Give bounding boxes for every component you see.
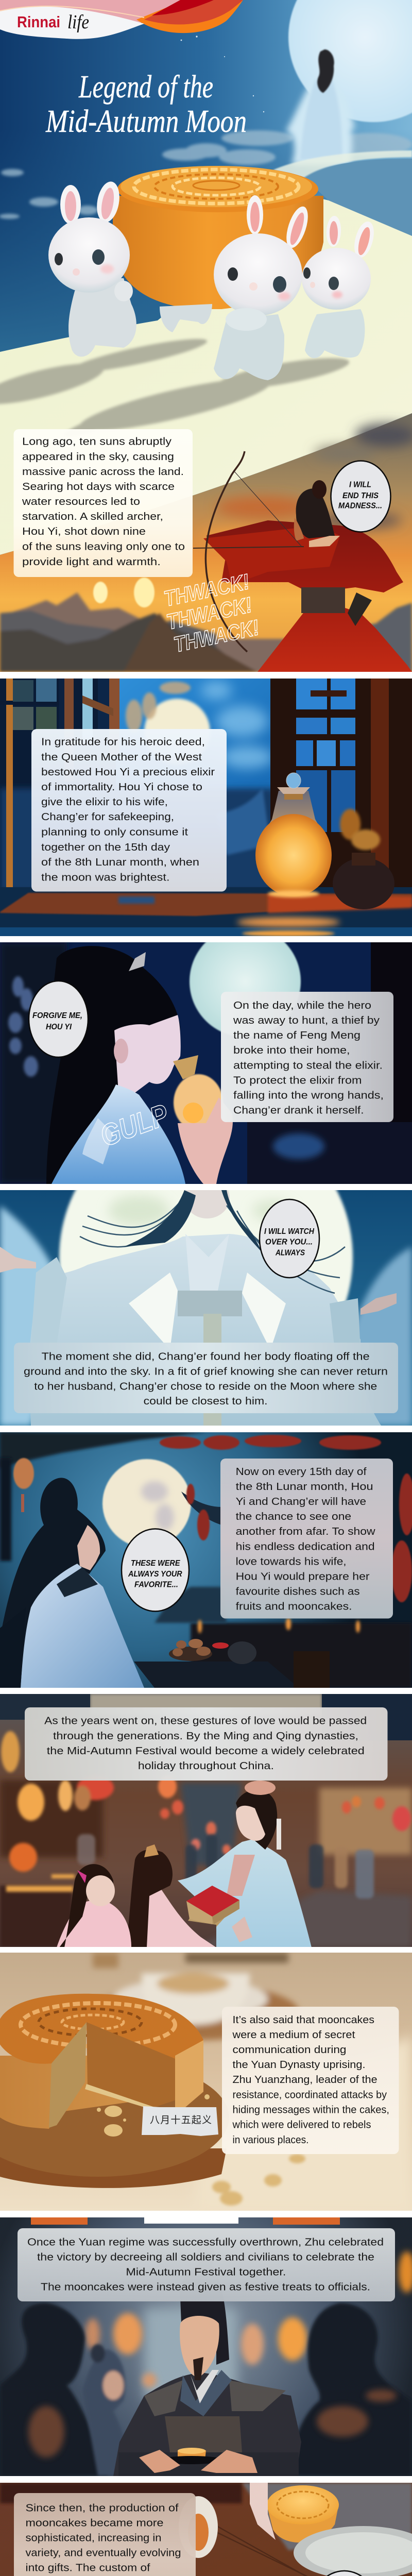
text card: gratitude: together on the 15th day [41, 842, 170, 853]
sound effect: thwack: THWACK! [171, 615, 261, 657]
text card: ten suns: Long ago, ten suns abruptly [22, 436, 171, 448]
background: blurred tabletop [0, 1953, 412, 2211]
text card: gratitude: of immortality. Hou Yi chose to [41, 782, 202, 793]
pale ring arc [273, 150, 412, 178]
blue cloud disc right of the mooncake [304, 159, 412, 236]
moon craters [141, 1481, 174, 1531]
speech bubble: I will end this madness [331, 461, 390, 532]
speech bubble: so yummy [310, 2571, 379, 2576]
text card: Yuan overthrown [18, 2228, 395, 2301]
text card: gratitude [31, 729, 227, 891]
text card: the thief: falling into the wrong hands, [233, 1090, 384, 1101]
background: blue night [0, 1432, 412, 1688]
mooncake on plate with hands [139, 2448, 258, 2473]
mountains [0, 592, 412, 672]
paper scroll with hidden message: 八月十五起义 [150, 2114, 212, 2126]
text card: every 15th day: the 8th Lunar month, Hou [236, 1481, 373, 1493]
glowing windows [198, 1618, 360, 1633]
Chang'e left hand [0, 1247, 36, 1273]
text card: every 15th day: love towards his wife, [236, 1556, 347, 1567]
full moon behind Chang'e [288, 0, 412, 122]
text card: secret communication: It’s also said that mooncakes [233, 2014, 374, 2026]
flowing hair [80, 1190, 345, 1293]
archer Hou Yi [193, 451, 412, 672]
crumbs on board [97, 2094, 210, 2137]
wooden board [0, 2058, 229, 2188]
soldier shoulder highlights [28, 2389, 397, 2458]
text card: ten suns: appeared in the sky, causing [22, 451, 174, 463]
text card: generations: As the years went on, these gestures of love would be passed [44, 1716, 367, 1727]
teacup [179, 2496, 218, 2558]
text card: secret communication: which were delivered to rebels [232, 2120, 371, 2131]
text card: the thief: broke into their home, [233, 1045, 350, 1056]
text card: the thief: On the day, while the hero [233, 1000, 371, 1011]
text card: Yuan overthrown: The mooncakes were instead given as festive treats to officials. [41, 2282, 370, 2293]
soldier bystander left [0, 2303, 108, 2476]
logo: Rinnai life: life [67, 11, 89, 33]
text card: the thief: the name of Feng Meng [233, 1030, 360, 1041]
giant moon [59, 1110, 353, 1404]
text card: secret communication [222, 2007, 399, 2154]
text card: floating away: ground and into the sky. In a fit of grief knowing she can never return [24, 1366, 388, 1377]
Chang'e figure in white robes [286, 49, 355, 165]
text card: every 15th day: his endless dedication and [236, 1541, 375, 1553]
background: moonlit sky [0, 1190, 412, 1426]
text card: gratitude: Chang’er for safekeeping, [41, 811, 174, 823]
text card: generations: through the generations. By the Ming and Qing dynasties, [53, 1731, 358, 1742]
text card: every 15th day: fruits and mooncakes. [236, 1601, 352, 1613]
white plate [294, 2526, 412, 2576]
speech bubble: these were always your favorite [122, 1529, 189, 1612]
panel: secret mooncake messages [0, 1953, 412, 2211]
background: night sky [0, 0, 412, 555]
market stall of goods [6, 1874, 75, 1892]
text card: the thief: was away to hunt, a thief by [233, 1015, 380, 1026]
text card: gratitude: of the 8th Lunar month, when [41, 857, 199, 868]
full moon [102, 1459, 191, 1548]
speech bubble: these were always your favorite: THESE WERE [131, 1559, 181, 1568]
text card: floating away: to her husband, Chang’er chose to reside on the Moon where she [34, 1381, 377, 1392]
paper scroll with hidden message [142, 2106, 218, 2136]
speech bubble: these were always your favorite: ALWAYS YOUR [128, 1570, 182, 1579]
bunny behind the cake [160, 304, 212, 332]
panel: Hou Yi's offerings [0, 1432, 412, 1688]
left lattice window [0, 679, 119, 936]
text card: since then: sophisticated, increasing in [26, 2533, 162, 2544]
logo: Rinnai life: Rinnai [17, 13, 60, 31]
moon spots [108, 1195, 294, 1340]
text card: since then: Since then, the production of [26, 2503, 179, 2514]
blossom branch [126, 682, 191, 733]
text card: secret communication: resistance, coordinated attacks by [233, 2090, 387, 2101]
background: lantern street [0, 1694, 412, 1947]
text card: ten suns: massive panic across the land. [22, 466, 184, 478]
sound effect: thwack [162, 569, 261, 657]
background: window with moonlit sky [0, 679, 412, 936]
red maple branches [160, 1435, 412, 1602]
text card: floating away [14, 1343, 398, 1413]
panel: Zhu's victory celebration [0, 2217, 412, 2476]
moon behind Chang'e [190, 926, 301, 1037]
soldier bystander right [288, 2303, 412, 2476]
text card: every 15th day: Hou Yi would prepare her [236, 1571, 370, 1583]
warm lantern glows [85, 2251, 412, 2387]
text card: ten suns: provide light and warmth. [22, 556, 161, 568]
Chang'e in flowing robes [28, 1177, 381, 1426]
panel: elixir of immortality [0, 679, 412, 937]
right wooden lattice [270, 679, 412, 891]
older girl from behind [126, 1844, 216, 1947]
sound effect: gulp: GULP [96, 1098, 173, 1153]
text card: every 15th day: Yi and Chang’er will have [236, 1496, 366, 1507]
text card: ten suns [13, 429, 193, 577]
moon in window [144, 699, 210, 765]
clouds in window [201, 681, 273, 769]
sunset sky [0, 413, 412, 672]
text card: the thief: attempting to steal the elixir. [233, 1060, 383, 1072]
giant mooncake [113, 166, 323, 309]
crumbs on table [212, 2154, 305, 2206]
text card: Yuan overthrown: the victory by decreeing all soldiers and civilians to celebrate the [37, 2252, 374, 2263]
crowd in the market [77, 1834, 374, 1899]
woman in blue hanfu [178, 1781, 312, 1947]
speech bubble: I will end this madness: MADNESS... [338, 502, 382, 511]
swirling mist right [349, 1247, 412, 1426]
background: misty camp [0, 2217, 412, 2476]
title: Mid-Autumn Moon [45, 104, 247, 139]
text card: since then [14, 2493, 196, 2576]
speech bubble: I will watch over you [260, 1199, 319, 1278]
red gift box [186, 1886, 239, 1927]
text card: every 15th day: the chance to see one [236, 1511, 351, 1522]
vase with dried flowers [333, 809, 394, 909]
red and orange lanterns [1, 1728, 411, 1872]
soldier bystander mid-left [82, 2344, 126, 2476]
speech bubble: I will watch over you: OVER YOU... [265, 1238, 313, 1247]
panel: festival through the generations [0, 1694, 412, 1947]
speech bubble: I will watch over you: I WILL WATCH [264, 1227, 314, 1236]
logo: Rinnai life [17, 11, 89, 33]
text card: ten suns: Searing hot days with scarce [22, 481, 175, 493]
bunny left [48, 180, 136, 357]
younger girl [57, 1864, 131, 1947]
text card: floating away: could be closest to him. [144, 1396, 268, 1407]
text card: secret communication: the Yuan Dynasty uprising. [233, 2059, 366, 2071]
text card: gratitude: give the elixir to his wife, [41, 796, 168, 808]
elixir flask glowing [255, 773, 332, 897]
background: wooden tabletop [0, 2483, 412, 2576]
text card: ten suns: of the suns leaving only one to [22, 541, 185, 552]
text card: secret communication: Zhu Yuanzhang, leader of the [233, 2074, 377, 2086]
Chang'e portrait [46, 946, 185, 1184]
hanging lantern [13, 1458, 34, 1512]
speech bubble: forgive me [29, 981, 88, 1057]
text card: every 15th day: another from afar. To show [236, 1526, 375, 1537]
text card: secret communication: were a medium of secret [232, 2029, 355, 2041]
text card: secret communication: hiding messages within the cakes, [233, 2104, 389, 2115]
panel: Chang'e drinks the elixir [0, 926, 412, 1184]
text card: gratitude: planning to only consume it [41, 826, 188, 838]
sun 2 [134, 578, 154, 607]
sunset clouds [201, 424, 412, 543]
text card: every 15th day: favourite dishes such as [236, 1586, 360, 1597]
speech bubble: forgive me: FORGIVE ME, [32, 1011, 82, 1020]
panel: cover and the ten suns [0, 0, 412, 672]
text card: secret communication: in various places. [233, 2134, 309, 2146]
text card: the thief [221, 992, 393, 1122]
text card: the thief: To protect the elixir from [233, 1075, 362, 1086]
header wave: brand ribbon [0, 0, 243, 39]
speech bubble: I will end this madness: END THIS [342, 492, 379, 500]
text card: since then: mooncakes became more [26, 2517, 164, 2529]
text card: generations: holiday throughout China. [138, 1760, 274, 1772]
text card: floating away: The moment she did, Chang’er found her body floating off the [42, 1351, 370, 1362]
night flowers [8, 976, 38, 1077]
text card: Yuan overthrown: Mid-Autumn Festival together. [126, 2267, 286, 2278]
title [45, 70, 247, 139]
text card: since then: variety, and eventually evolving [26, 2547, 181, 2558]
Zhu Yuanzhang in armour [113, 2243, 301, 2476]
sound effect: thwack: THWACK! [164, 592, 254, 634]
bunny shadows [0, 337, 350, 429]
text card: since then: into gifts. The custom of [26, 2563, 150, 2574]
panel: mooncakes become gifts [0, 2483, 412, 2576]
distant clouds [0, 130, 412, 219]
text card: every 15th day: Now on every 15th day of [236, 1466, 367, 1478]
sliced mooncake [0, 1994, 203, 2129]
text card: gratitude: bestowed Hou Yi a precious elixir [41, 767, 215, 778]
text card: secret communication: communication during [233, 2044, 346, 2056]
speech bubble: I will watch over you: ALWAYS [275, 1249, 305, 1257]
text card: the thief: Chang’er drank it herself. [233, 1105, 364, 1116]
text card: ten suns: starvation. A skilled archer, [22, 511, 163, 522]
tea table with mooncakes [134, 1639, 330, 1688]
pagoda roof silhouette [216, 788, 270, 855]
background: night room [0, 942, 412, 1184]
swirling mist left [0, 1206, 60, 1426]
text card: generations: the Mid-Autumn Festival would become a widely celebrated [47, 1745, 365, 1757]
text card: generations [25, 1707, 387, 1781]
title: Legend of the [78, 70, 213, 105]
speech bubble: these were always your favorite: FAVORITE... [134, 1581, 178, 1589]
hand [178, 1097, 233, 1184]
elixir flask held to lips [173, 1055, 223, 1131]
pagoda roof [181, 1492, 221, 1525]
blurred teacup [93, 1973, 299, 2040]
bunny centre [214, 195, 312, 380]
distant pagoda [154, 1587, 227, 1623]
text card: Yuan overthrown: Once the Yuan regime was successfully overthrown, Zhu celebrated [27, 2237, 384, 2248]
Hou Yi from behind [0, 1478, 144, 1688]
stars [181, 36, 264, 112]
moon surface crescent [0, 196, 412, 555]
sound effect: thwack: THWACK! [162, 569, 251, 611]
text card: gratitude: In gratitude for his heroic deed, [41, 737, 205, 748]
table and rug [0, 887, 412, 937]
text card: ten suns: Hou Yi, shot down nine [22, 526, 146, 537]
table grooves [31, 2514, 412, 2576]
text card: every 15th day [220, 1459, 393, 1619]
speech bubble: forgive me: HOU YI [46, 1023, 72, 1031]
speech bubble: I will end this madness: I WILL [349, 481, 371, 489]
text card: gratitude: the Queen Mother of the West [41, 752, 202, 763]
sun 1 [93, 582, 108, 603]
panel: Chang'e floats to the moon [0, 1110, 412, 1426]
Chang'e right hand [360, 1293, 397, 1315]
held mooncake top [250, 2483, 339, 2543]
text card: ten suns: water resources led to [22, 496, 140, 507]
text card: gratitude: the moon was brightest. [41, 872, 170, 883]
bunny right [302, 215, 377, 358]
